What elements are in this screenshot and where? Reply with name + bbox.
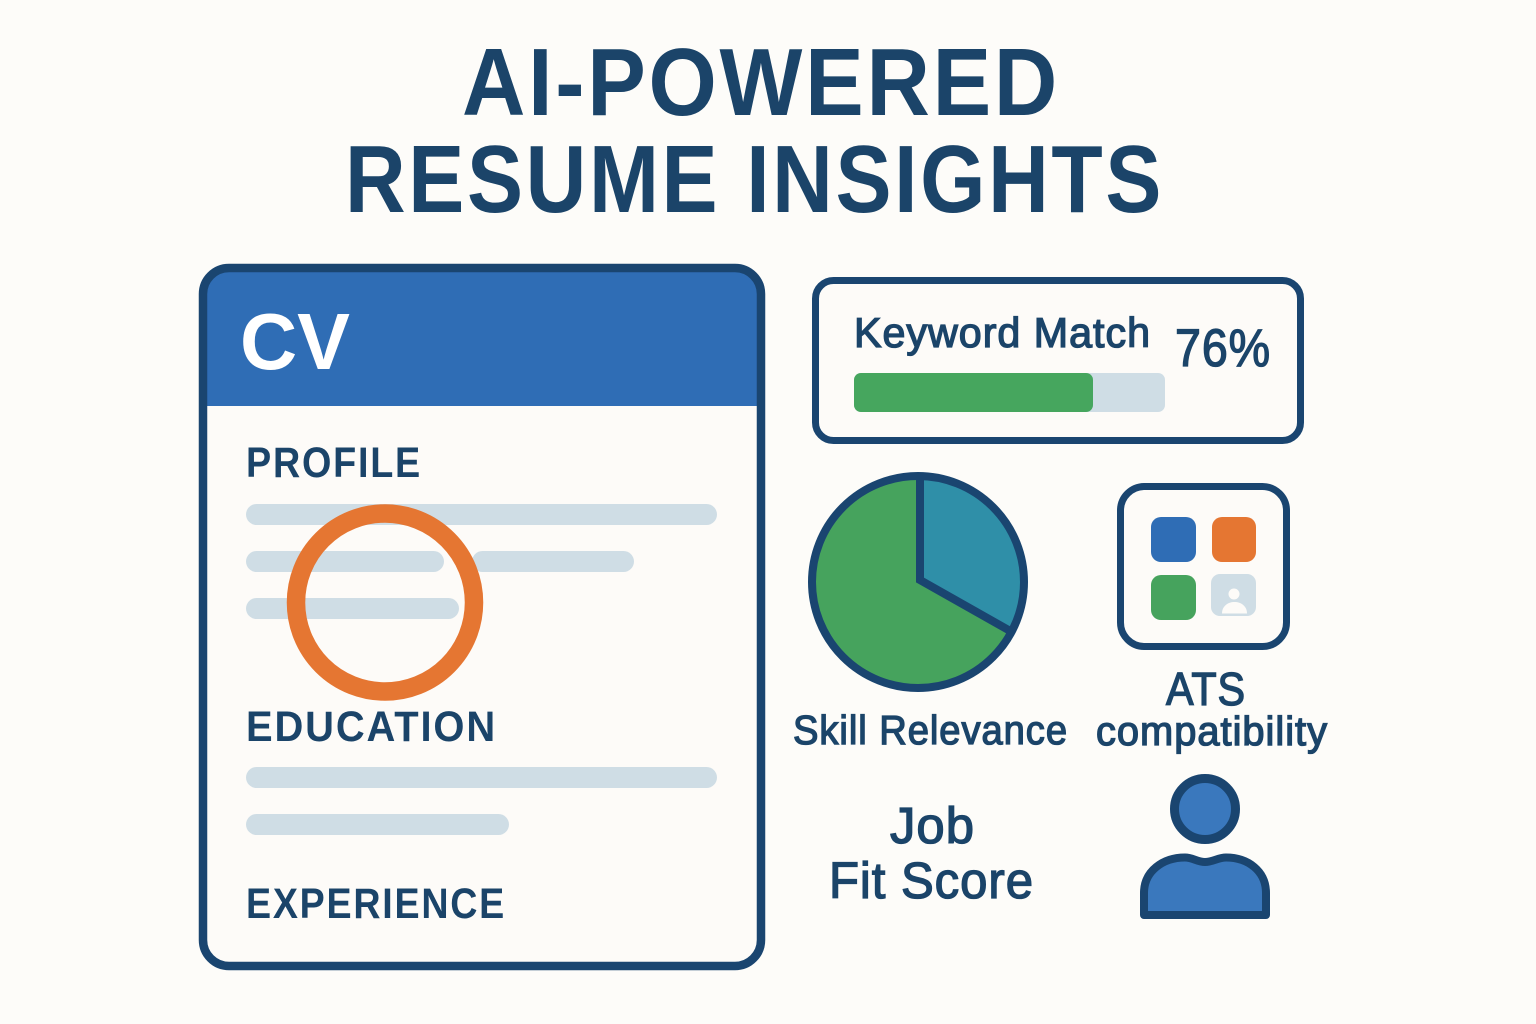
education text lines [246, 767, 717, 835]
pie chart [812, 475, 1025, 688]
heading: education: EDUCATION [246, 703, 497, 751]
ATS tile: grey person [1211, 574, 1256, 616]
title: AI-POWERED [462, 29, 1060, 136]
ATS tile: green [1151, 575, 1196, 620]
heading: experience: EXPERIENCE [246, 880, 506, 928]
compatibility label: compatibility [1096, 708, 1328, 754]
progress bar fill [854, 373, 1093, 412]
ATS box [1120, 486, 1286, 646]
ATS label: ATS [1166, 663, 1246, 715]
panel: CV document [203, 268, 761, 966]
heading: profile: PROFILE [246, 439, 422, 487]
panel: skill relevance [793, 475, 1068, 753]
icon: person [1144, 778, 1266, 915]
CV header label: CV [240, 297, 350, 386]
title: RESUME INSIGHTS [345, 126, 1164, 233]
keyword box [816, 280, 1300, 440]
job fit score label: Fit Score [829, 852, 1034, 909]
orange highlight ring [296, 514, 474, 692]
keyword percentage: 76% [1175, 319, 1271, 378]
title [345, 29, 1164, 233]
skill relevance label: Skill Relevance [793, 707, 1068, 753]
progress bar track [854, 373, 1165, 412]
ATS tile: blue [1151, 517, 1196, 562]
CV card border [203, 268, 761, 966]
keyword label: Keyword Match [854, 309, 1151, 356]
job fit score label [829, 797, 1034, 909]
CV card background [203, 268, 761, 966]
ATS tile: orange [1212, 517, 1256, 562]
panel: keyword match [816, 280, 1300, 440]
panel: ATS compatibility [1096, 486, 1328, 754]
CV header band [203, 268, 761, 406]
job fit score label: Job [890, 797, 975, 854]
profile text lines [246, 504, 717, 619]
